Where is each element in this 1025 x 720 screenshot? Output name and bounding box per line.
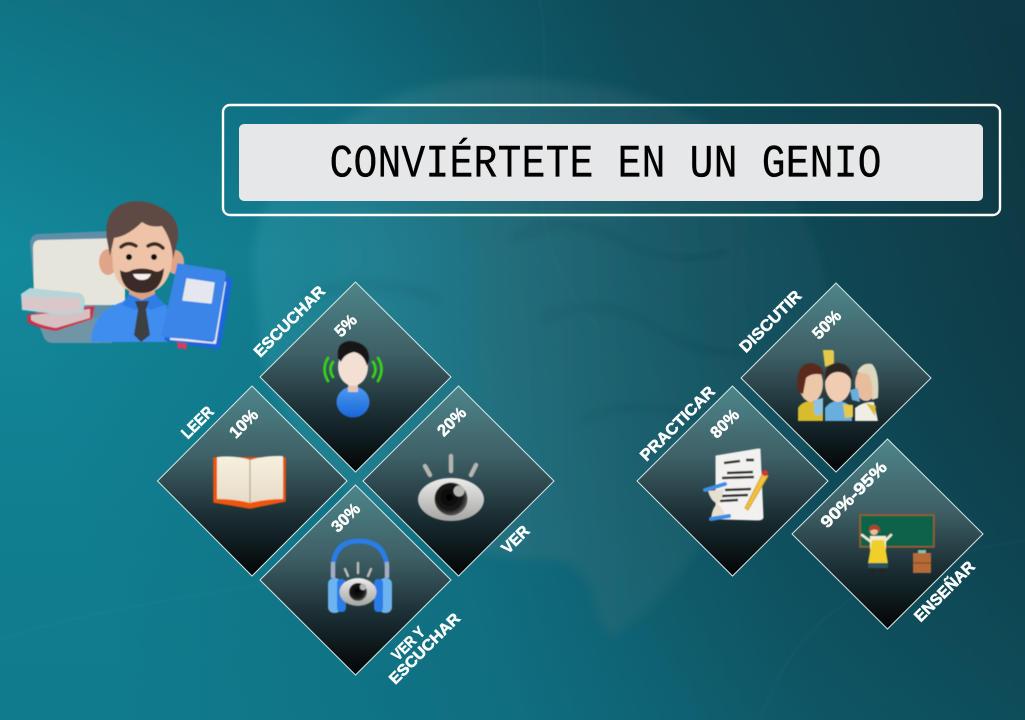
icon: open book: [214, 456, 285, 508]
diamond: [260, 282, 451, 472]
blue notebook: [162, 264, 232, 350]
panel: practicar: [637, 383, 828, 576]
title frame: [223, 105, 1000, 215]
title bar: [239, 124, 983, 201]
label: VER Y: [388, 623, 429, 664]
diamond: [637, 386, 828, 576]
label: DISCUTIR: [737, 287, 806, 356]
diamond: [260, 485, 451, 675]
label: VER: [499, 522, 534, 557]
percentage: 50%: [809, 307, 845, 343]
mouth: [133, 274, 151, 280]
diamond: [741, 283, 931, 472]
icon: three people talking: [797, 350, 878, 421]
icon: headphones with eye: [328, 541, 392, 613]
panel: ver y escuchar: [260, 485, 464, 688]
label: LEER: [179, 403, 218, 442]
panel: ver: [363, 386, 554, 576]
laptop: [30, 231, 125, 343]
eyes and brows: [121, 244, 163, 260]
percentage: 30%: [328, 500, 364, 536]
icon: papers, hourglass and pencil: [705, 449, 768, 520]
label: ESCUCHAR: [251, 283, 329, 361]
percentage: 10%: [226, 406, 262, 442]
icon: person listening: [324, 341, 382, 418]
panel: discutir: [737, 283, 931, 472]
stacked books: [21, 288, 95, 331]
percentage: 90%-95%: [817, 458, 891, 532]
brain silhouette: [253, 78, 832, 636]
percentage: 5%: [331, 311, 361, 341]
label: ESCUCHAR: [386, 610, 464, 688]
percentage: 20%: [434, 404, 470, 440]
tie: [134, 301, 150, 342]
percentage: 80%: [707, 406, 743, 442]
neck and collar: [122, 288, 165, 310]
label: ENSEÑAR: [909, 556, 979, 626]
body: [91, 294, 167, 342]
beard: [120, 268, 164, 293]
diamond: [363, 386, 554, 576]
panel: escuchar: [251, 282, 451, 472]
ears: [99, 249, 117, 275]
diamond: [158, 386, 347, 576]
panel: leer: [158, 386, 347, 576]
illustration: teacher with laptop, books and notebook: [21, 201, 232, 350]
icon: eye: [418, 456, 484, 521]
hair: [106, 201, 178, 259]
label: PRACTICAR: [637, 383, 719, 465]
title: CONVIÉRTETE EN UN GENIO: [329, 138, 882, 190]
head: [111, 205, 174, 293]
diamond: [792, 439, 983, 629]
icon: teacher at blackboard: [860, 515, 934, 573]
panel: enseñar: [792, 439, 983, 629]
